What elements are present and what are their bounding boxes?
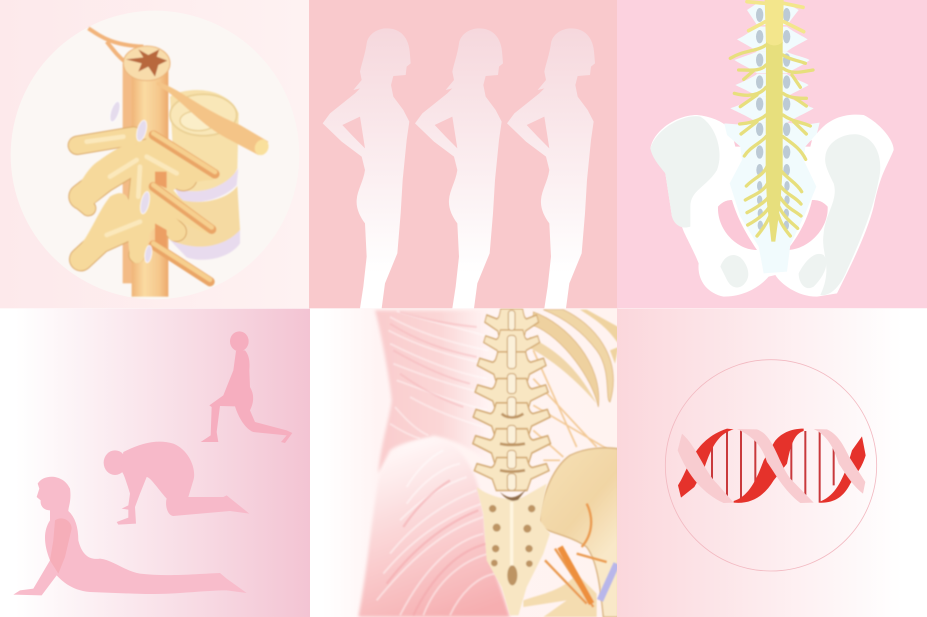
pink strands [678,429,865,503]
vertebrae and sacrum [724,3,820,273]
figure: cobra pose [13,477,247,595]
panel: stretching exercises [0,309,310,617]
circular backdrop [11,11,299,299]
anatomy artwork [70,28,271,297]
pelvis [540,448,618,617]
lower bones and sciatic nerves [523,504,617,617]
bony outlines [77,136,183,259]
upper back muscle [374,309,478,472]
silhouette 2 [415,28,503,308]
pelvis bone [650,115,894,297]
spinal cord and nerves [730,0,813,242]
circle outline [665,360,877,571]
ribs and nerves [528,310,618,460]
panel: three side-profile silhouettes [309,0,618,308]
base pair rungs [712,430,834,502]
red strands [678,429,866,503]
iliac shading [650,116,880,295]
silhouette 1 [323,28,411,308]
figure: kneeling lunge [201,331,292,443]
lumbar vertebrae [473,309,550,491]
pelvic openings [718,140,828,250]
gluteal muscle [358,439,510,617]
vertebral foramina [756,8,790,230]
panel: pelvis and spinal nerves [617,0,927,308]
sacrum [477,484,550,615]
silhouette 3 [507,28,595,308]
spinous processes [507,310,516,490]
panel: spinal cord and vertebrae illustration [0,0,310,308]
figure: hands and knees [104,442,249,525]
panel: back muscles and lumbar spine illustration [356,308,617,617]
panel: DNA helix [617,309,927,617]
bony fill [70,133,217,268]
bone highlights [87,137,177,235]
